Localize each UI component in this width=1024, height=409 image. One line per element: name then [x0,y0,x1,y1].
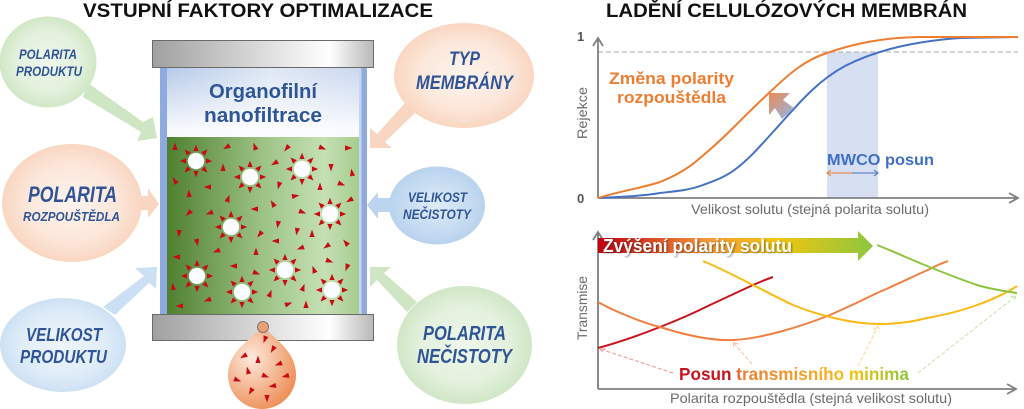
dashed arrow: red minimum [600,349,673,373]
bubble: impurity size: NEČISTOTY [403,205,472,222]
arrow: product size [103,267,157,315]
solvent polarity change label [609,69,735,107]
bubble: membrane type: TYP [449,49,480,70]
y axis label: Transmise [575,276,590,340]
chart: transmission curves [575,231,1017,406]
axis ticks: 1 [577,29,584,44]
bubble: product size: PRODUKTU [20,347,108,367]
product molecules with rays [180,145,348,308]
arrow: solvent polarity [140,188,159,218]
bubble: membrane type [394,23,534,128]
MWCO band [827,52,878,198]
bubble: impurity polarity: POLARITA [423,323,506,345]
MWCO label: MWCO posun [827,152,934,169]
column label: nanofiltrace [204,105,322,127]
impurity particles [170,142,355,309]
shift of transmission minimum label: Posun transmisního minima [679,364,909,384]
green curve [877,245,1017,293]
title: membrane tuning: LADĚNÍ CELULÓZOVÝCH MEMBRÁN [606,0,967,22]
arrow: membrane type [370,103,415,148]
dashed arrow: green minimum [918,296,1016,373]
bubble: impurity polarity [397,286,532,404]
arrow: product polarity [83,83,157,141]
y axis label: Rejekce [575,87,590,139]
red curve [598,277,773,348]
x axis label: Velikost solutu (stejná polarita solutu) [691,201,929,217]
membrane column [160,67,367,314]
chart: rejection curves: 0 [577,191,584,206]
x axis label: Polarita rozpouštědla (stejná velikost solutu) [670,390,952,406]
top cap [152,40,374,68]
bottom cap [152,314,374,340]
column label [204,81,322,127]
axes [593,38,1018,203]
bubble: membrane type: MEMBRÁNY [416,72,515,94]
bubble: product polarity: PRODUKTU [16,63,83,79]
orange curve [598,37,1018,198]
arrow: impurity polarity [370,267,417,312]
permeate drop [228,322,296,409]
axes [593,232,1016,394]
bubble: solvent polarity: ROZPOUŠTĚDLA [23,209,120,224]
gradient banner arrow [598,231,873,261]
title: input factors: VSTUPNÍ FAKTORY OPTIMALIZACE [83,0,433,22]
bubble: product polarity: POLARITA [19,46,77,62]
blue curve [598,37,1018,198]
shift arrow [769,93,794,119]
orange curve [598,261,948,340]
bubble: impurity size: VELIKOST [408,189,468,205]
dashed arrow: yellow minimum [858,326,880,366]
chart: rejection curves [575,29,1018,217]
bubble: impurity polarity: NEČISTOTY [417,344,513,368]
arrow: impurity size [367,192,392,219]
solvent polarity change label: rozpouštědla [617,88,727,107]
bubble: product polarity [0,16,96,108]
bubble: product size: VELIKOST [26,325,104,345]
solvent polarity change label: Změna polarity [609,69,735,88]
green liquid [167,137,359,314]
column label: Organofilní [209,81,318,103]
bubble: solvent polarity [2,144,142,262]
bubble: impurity size [389,166,485,244]
banner label: Zvýšení polarity solutu [603,236,792,256]
solvent headspace [167,67,359,137]
bubble: solvent polarity: POLARITA [28,182,117,207]
bubble: product size [0,298,126,392]
yellow curve [703,261,1017,324]
MWCO double arrow [827,170,878,176]
dashed arrow: orange minimum [733,342,752,364]
